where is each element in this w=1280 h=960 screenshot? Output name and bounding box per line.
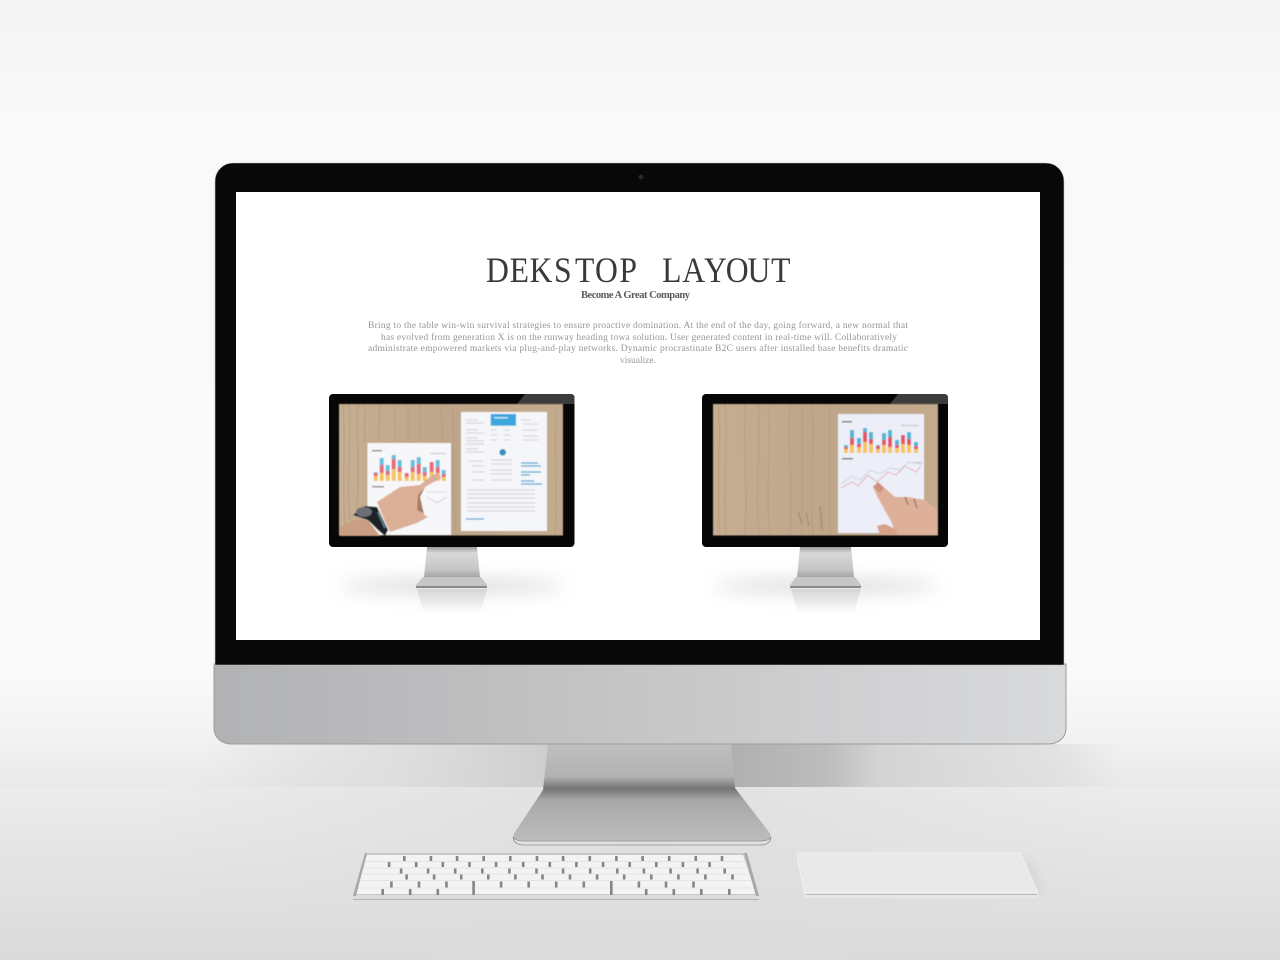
keyboard [353, 853, 759, 900]
mini stand [416, 547, 487, 614]
body paragraph: visualize. [620, 356, 656, 366]
key row lines [356, 862, 754, 888]
key gaps [383, 856, 732, 895]
desk shading [140, 787, 1140, 960]
pointing hand with watch [340, 473, 441, 536]
title: DEKSTOP LAYOUT [486, 251, 791, 290]
camera [639, 175, 643, 179]
subtitle: Become A Great Company [581, 290, 691, 301]
key surface [356, 855, 756, 894]
photo: hand pointing at charts [339, 404, 563, 536]
trackpad surface [797, 853, 1037, 893]
mini bezel [702, 394, 948, 547]
mini stand [790, 547, 861, 614]
photo: finger on line chart [713, 404, 938, 536]
right mini monitor [702, 394, 948, 614]
keyboard body [353, 853, 759, 900]
body paragraph: administrate empowered markets via plug-and-play networks. Dynamic procrastinate B2C users after installed base benefits dramatic [368, 343, 908, 354]
chart paper [838, 414, 924, 533]
mini monitor shadow [340, 580, 564, 592]
computer monitor [214, 163, 1066, 845]
side edges [353, 853, 759, 896]
trackpad [797, 853, 1044, 898]
mini monitor shadow [714, 580, 938, 592]
keyboard front edge [353, 895, 759, 900]
monitor stand [513, 744, 771, 845]
background: desk [0, 787, 1280, 960]
monitor bezel [215, 163, 1064, 665]
wall shadow under monitor [200, 744, 1120, 787]
mini bezel [329, 394, 574, 547]
bezel highlight [517, 394, 574, 404]
report paper [461, 412, 547, 531]
body paragraph [368, 320, 908, 366]
left mini monitor [329, 394, 574, 614]
bezel highlight [890, 394, 948, 404]
body paragraph: has evolved from generation X is on the runway heading towa solution. User generated content in real-time will. Collaboratively [381, 332, 897, 343]
trackpad shadow [1022, 858, 1044, 892]
chart paper [368, 443, 451, 535]
monitor chin [214, 664, 1066, 744]
trackpad edge [804, 893, 1038, 898]
screen [236, 192, 1040, 640]
pointing hand [873, 482, 937, 535]
body paragraph: Bring to the table win-win survival strategies to ensure proactive domination. At the end of the day, going forward, a new normal that [368, 320, 908, 331]
